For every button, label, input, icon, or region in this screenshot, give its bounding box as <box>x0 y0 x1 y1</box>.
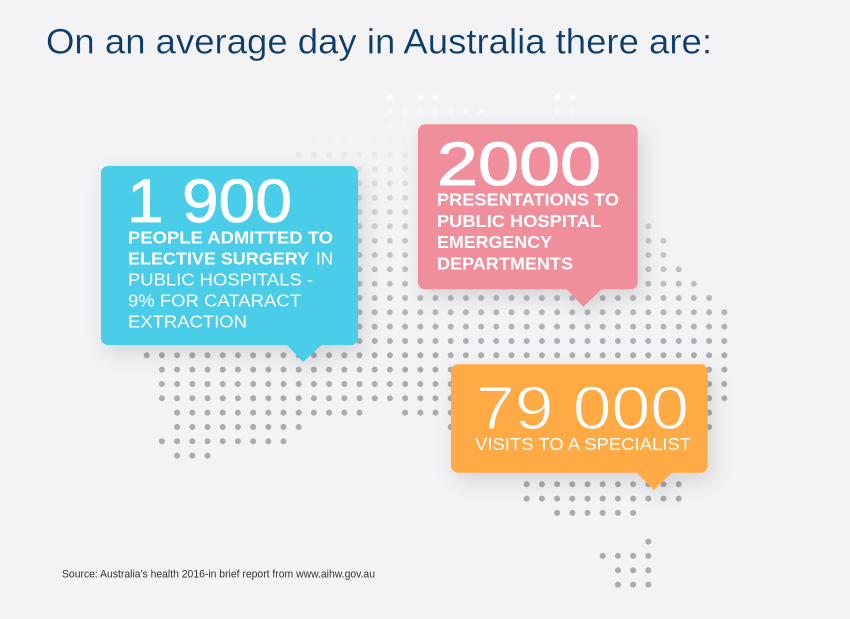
statistic: 1 900: 1 900 <box>127 167 292 235</box>
description text: 9% FOR CATARACT <box>128 291 301 311</box>
description text: PUBLIC HOSPITALS - <box>128 270 313 290</box>
callout: 2000 emergency presentations <box>418 124 638 307</box>
callout: 79 000 specialist visits <box>451 364 708 490</box>
dotted map of Australia <box>147 97 724 585</box>
description text: EMERGENCY <box>437 232 552 252</box>
description text: PUBLIC HOSPITAL <box>437 211 601 231</box>
description text: PEOPLE ADMITTED TO <box>128 227 333 247</box>
description text: DEPARTMENTS <box>437 253 573 273</box>
description text: IN <box>316 249 333 269</box>
orange speech bubble <box>451 364 708 490</box>
description text: PRESENTATIONS TO <box>437 190 619 210</box>
description text: ELECTIVE SURGERY <box>128 249 309 269</box>
statistic: 2000: 2000 <box>437 130 601 198</box>
title: On an average day in Australia there are: <box>46 22 712 62</box>
description text: VISITS TO A SPECIALIST <box>475 434 691 454</box>
pink speech bubble <box>418 124 638 307</box>
statistic: 79 000: 79 000 <box>476 374 689 442</box>
description text: EXTRACTION <box>128 312 247 332</box>
description text <box>128 227 333 332</box>
description text <box>437 190 619 273</box>
blue speech bubble <box>101 166 358 362</box>
callout: 1 900 elective surgery admissions <box>101 166 358 362</box>
source note: Source: Australia's health 2016-in brief report from www.aihw.gov.au <box>62 568 375 580</box>
